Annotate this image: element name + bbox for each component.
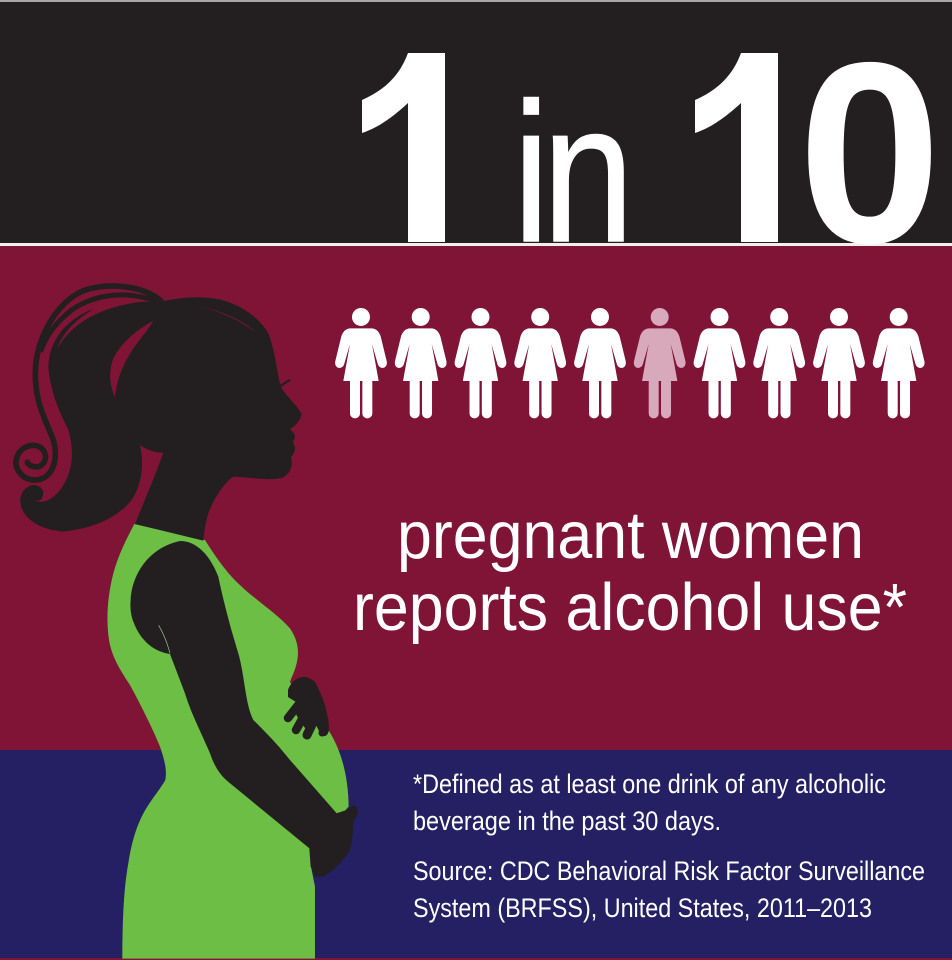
panel: maroon middle band [0,246,952,750]
headline text: pregnant women reports alcohol use: pregnant women [397,498,864,573]
panel: navy footer band [0,750,952,958]
headline text: pregnant women reports alcohol use: reports alcohol use* [353,570,907,645]
eyelash [279,380,289,387]
head, neck and ponytail [16,286,302,541]
bottom edge [0,958,952,960]
title: 1 in 10: 1 [355,8,498,297]
top hairline [0,0,952,2]
title: 1 in 10 [362,53,931,244]
illustration: pregnant woman silhouette [16,286,358,959]
dress [107,524,349,959]
footnote and source text [413,769,925,923]
footnote and source text: *Defined as at least one drink of any alcoholic [413,769,886,799]
title: 1 in 10: 0 [798,8,942,297]
title: 1 in 10: 1 [688,8,832,297]
footnote and source text: System (BRFSS), United States, 2011–2013 [413,893,872,923]
icon row: ten women, one highlighted [335,308,925,418]
hair highlights [57,300,256,397]
arm [130,541,358,877]
panel: black headline band [0,2,952,243]
hand on belly [288,677,329,736]
title: 1 in 10: in [513,61,627,283]
arm highlight [159,625,170,653]
footnote and source text: beverage in the past 30 days. [413,806,721,836]
headline text: pregnant women reports alcohol use [353,498,907,645]
divider line [0,243,952,246]
